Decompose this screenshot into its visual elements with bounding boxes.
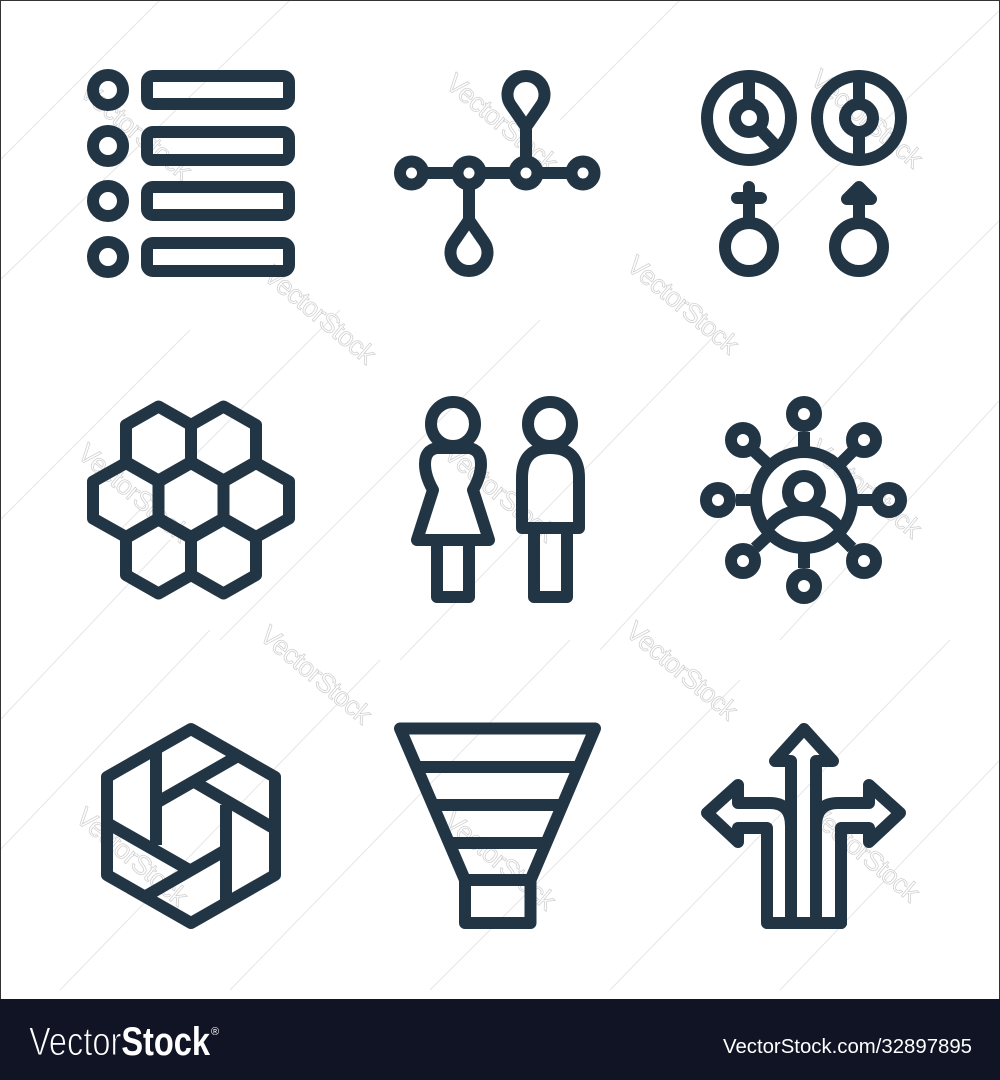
watermark: repeated VectorStock marks: VectorStock: [802, 798, 926, 908]
icon: bullet list: [93, 75, 289, 272]
footer image id: VectorStock.com/32897895: [723, 1036, 972, 1058]
icon: gender charts and symbols: [707, 76, 901, 271]
footer bar: [0, 999, 1000, 1080]
icon: honeycomb: [93, 406, 289, 594]
watermark: repeated VectorStock marks: VectorStock: [258, 260, 382, 370]
icon: network nodes with drops: [400, 76, 594, 271]
icon: woman and man: [417, 402, 579, 597]
watermark: repeated VectorStock marks: VectorStock: [620, 616, 744, 726]
icon: sales funnel: [400, 728, 595, 923]
watermark: repeated VectorStock marks: VectorStock: [440, 68, 564, 178]
watermark: repeated VectorStock marks: VectorStock: [805, 64, 929, 174]
icon: camera aperture hexagon: [107, 729, 275, 923]
footer logo: VectorStock: [29, 1020, 211, 1064]
footer registered mark: ®: [211, 1026, 219, 1038]
watermark: repeated VectorStock marks: VectorStock: [438, 806, 562, 916]
watermark: repeated VectorStock marks: VectorStock: [72, 438, 196, 548]
watermark: repeated VectorStock marks: VectorStock: [621, 250, 745, 360]
watermark: repeated VectorStock marks: VectorStock: [70, 802, 194, 912]
watermark: repeated VectorStock marks: VectorStock: [804, 434, 928, 544]
watermark: repeated VectorStock marks: VectorStock: [254, 620, 378, 730]
watermark: repeated VectorStock marks: VectorStock: [438, 438, 562, 548]
watermark: repeated VectorStock marks: VectorStock: [74, 76, 198, 186]
icon: three direction arrows: [707, 729, 900, 923]
watermark: repeated VectorStock marks: [70, 64, 929, 916]
icon: person network: [706, 402, 901, 598]
